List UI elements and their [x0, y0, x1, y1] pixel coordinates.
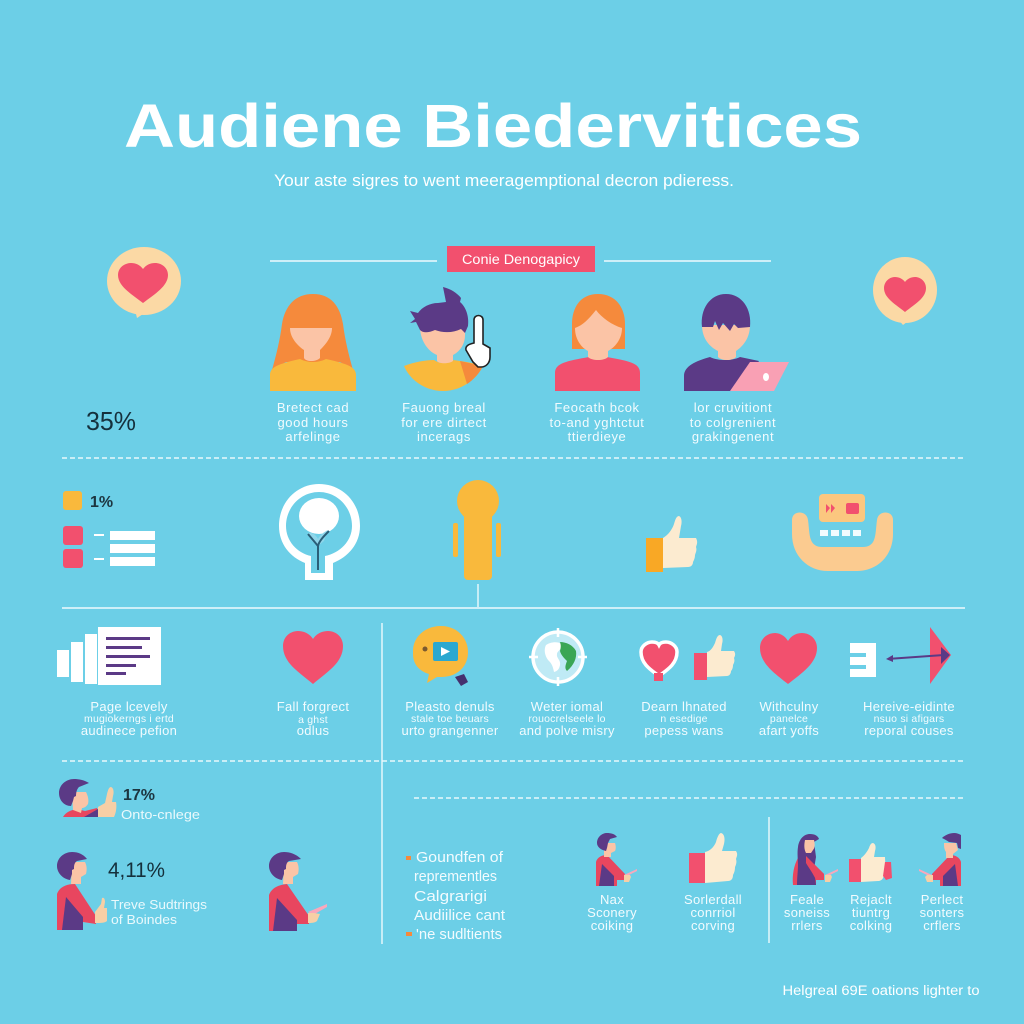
caption: small person 3	[920, 892, 965, 933]
caption: heart large: afart yoffs	[759, 723, 819, 738]
stat: 17% with person	[59, 779, 200, 822]
caption: arrow	[863, 699, 955, 738]
icon: person with phone	[269, 852, 327, 931]
caption: heart large: panelce	[770, 713, 808, 725]
caption: thumbs up small: tiuntrg	[852, 905, 890, 920]
caption: heart: odlus	[297, 723, 329, 738]
caption: thumbs up red: conrriol	[690, 905, 736, 920]
caption: thumbs up small: Rejaclt	[850, 892, 892, 907]
caption: small person 2: rrlers	[791, 918, 823, 933]
icon: thumbs up red	[689, 833, 737, 883]
persona 1 caption: Bretect cad	[277, 400, 349, 415]
section heading: demographics	[270, 246, 771, 272]
persona 1 caption	[277, 400, 349, 444]
icon: thumbs up small	[849, 843, 892, 882]
icon: heart bubble left	[107, 247, 181, 318]
stat: 4,11% with person: Treve Sudtrings	[111, 897, 208, 912]
caption: page	[81, 699, 177, 738]
caption: small person 1: Sconery	[587, 905, 637, 920]
persona 4	[684, 294, 789, 391]
caption: small person 1: coiking	[591, 918, 633, 933]
caption: small person 3: crflers	[923, 918, 961, 933]
caption: heart: a ghst	[298, 714, 328, 726]
subtitle: Your aste sigres to went meeragemptional decron pdieress.	[274, 172, 734, 190]
footer note: Helgreal 69E oations lighter to	[782, 983, 980, 998]
caption: small person 1	[587, 892, 637, 933]
icon: small person 3	[919, 833, 961, 886]
caption: small person 2: Feale	[790, 892, 824, 907]
icon: arrow target	[850, 627, 951, 684]
title: Audiene Biedervitices	[124, 92, 862, 160]
stat: 17% with person: Onto-cnlege	[121, 807, 200, 822]
caption: small person 3: Perlect	[921, 892, 963, 907]
icon: small person 2	[793, 834, 838, 885]
bullet list	[406, 850, 505, 943]
persona 2 caption	[401, 400, 487, 444]
caption: heart	[277, 699, 349, 738]
caption: globe: rouocrelseele lo	[528, 713, 606, 725]
caption: heart large	[759, 699, 819, 738]
persona 1 caption: arfelinge	[285, 429, 341, 444]
caption: small person 3: sonters	[920, 905, 965, 920]
caption: thumbs up small	[850, 892, 892, 933]
caption: chat video: urto grangenner	[401, 723, 499, 738]
persona 3 caption	[550, 400, 644, 444]
caption: arrow: nsuo si afigars	[874, 713, 944, 725]
icon: keyhole tree bulb	[279, 484, 360, 580]
stat: 35%: 35%	[86, 406, 136, 436]
bullet list: 'ne sudltients	[416, 927, 502, 943]
persona 1 caption: good hours	[277, 415, 349, 430]
persona 3	[555, 294, 640, 391]
caption: heart: Fall forgrect	[277, 699, 349, 714]
caption: chat video	[401, 699, 499, 738]
bullet list: reprementles	[414, 869, 497, 885]
caption: small person 1: Nax	[600, 892, 624, 907]
caption: heart badge: pepess wans	[644, 723, 724, 738]
caption: globe	[519, 699, 615, 738]
caption: chat video: stale toe beuars	[411, 713, 489, 725]
caption: heart large: Withculny	[759, 699, 819, 714]
caption: thumbs up red	[684, 892, 742, 933]
stat: 4,11% with person: 4,11%	[108, 859, 165, 882]
persona 4 caption: grakingenent	[692, 429, 774, 444]
caption: heart badge: n esedige	[660, 713, 708, 725]
stat: 4,11% with person	[57, 852, 208, 930]
icon: document with bars	[57, 627, 161, 685]
persona 2 caption: incerags	[417, 429, 471, 444]
icon: thumbs up	[646, 516, 697, 572]
caption: arrow: reporal couses	[864, 723, 954, 738]
caption: arrow: Hereive-eidinte	[863, 699, 955, 714]
bullet list: Goundfen of	[416, 850, 504, 866]
caption: heart badge	[641, 699, 727, 738]
caption: page: mugiokerngs i ertd	[84, 713, 174, 725]
icon: device in hand	[792, 494, 893, 571]
icon: heart badge and thumbs up	[641, 635, 735, 681]
icon: globe	[529, 628, 587, 686]
legend: 1%	[90, 494, 113, 511]
caption: globe: and polve misry	[519, 723, 615, 738]
bullet list: Audiilice cant	[414, 908, 505, 924]
caption: thumbs up red: Sorlerdall	[684, 892, 742, 907]
caption: page: Page lcevely	[90, 699, 168, 714]
icon: small person 1	[596, 833, 637, 886]
caption: small person 2	[784, 892, 830, 933]
caption: chat video: Pleasto denuls	[405, 699, 495, 714]
persona 2 caption: for ere dirtect	[401, 415, 487, 430]
icon: heart bubble right	[873, 257, 937, 325]
stat: 17% with person: 17%	[123, 787, 155, 804]
persona 4 caption: to colgrenient	[690, 415, 776, 430]
caption: globe: Weter iomal	[531, 699, 603, 714]
icon: chat video	[413, 626, 468, 686]
caption: thumbs up red: corving	[691, 918, 735, 933]
persona 3 caption: ttierdieye	[568, 429, 626, 444]
legend	[63, 491, 155, 568]
stat: 4,11% with person: of Boindes	[111, 912, 178, 927]
icon: heart large	[760, 633, 817, 684]
section heading: demographics: Conie Denogapicy	[462, 252, 580, 267]
caption: small person 2: soneiss	[784, 905, 830, 920]
caption: heart badge: Dearn lhnated	[641, 699, 727, 714]
persona 3 caption: Feocath bcok	[554, 400, 640, 415]
bullet list: Calgrarigi	[414, 889, 487, 905]
persona 3 caption: to-and yghtctut	[550, 415, 644, 430]
persona 1	[270, 294, 356, 391]
persona 2	[404, 287, 490, 391]
caption: thumbs up small: colking	[850, 918, 892, 933]
icon: heart	[283, 631, 343, 684]
persona 4 caption: lor cruvitiont	[694, 400, 772, 415]
persona 4 caption	[690, 400, 776, 444]
icon: microphone figure	[453, 480, 501, 607]
caption: page: audinece pefion	[81, 723, 177, 738]
persona 2 caption: Fauong breal	[402, 400, 486, 415]
